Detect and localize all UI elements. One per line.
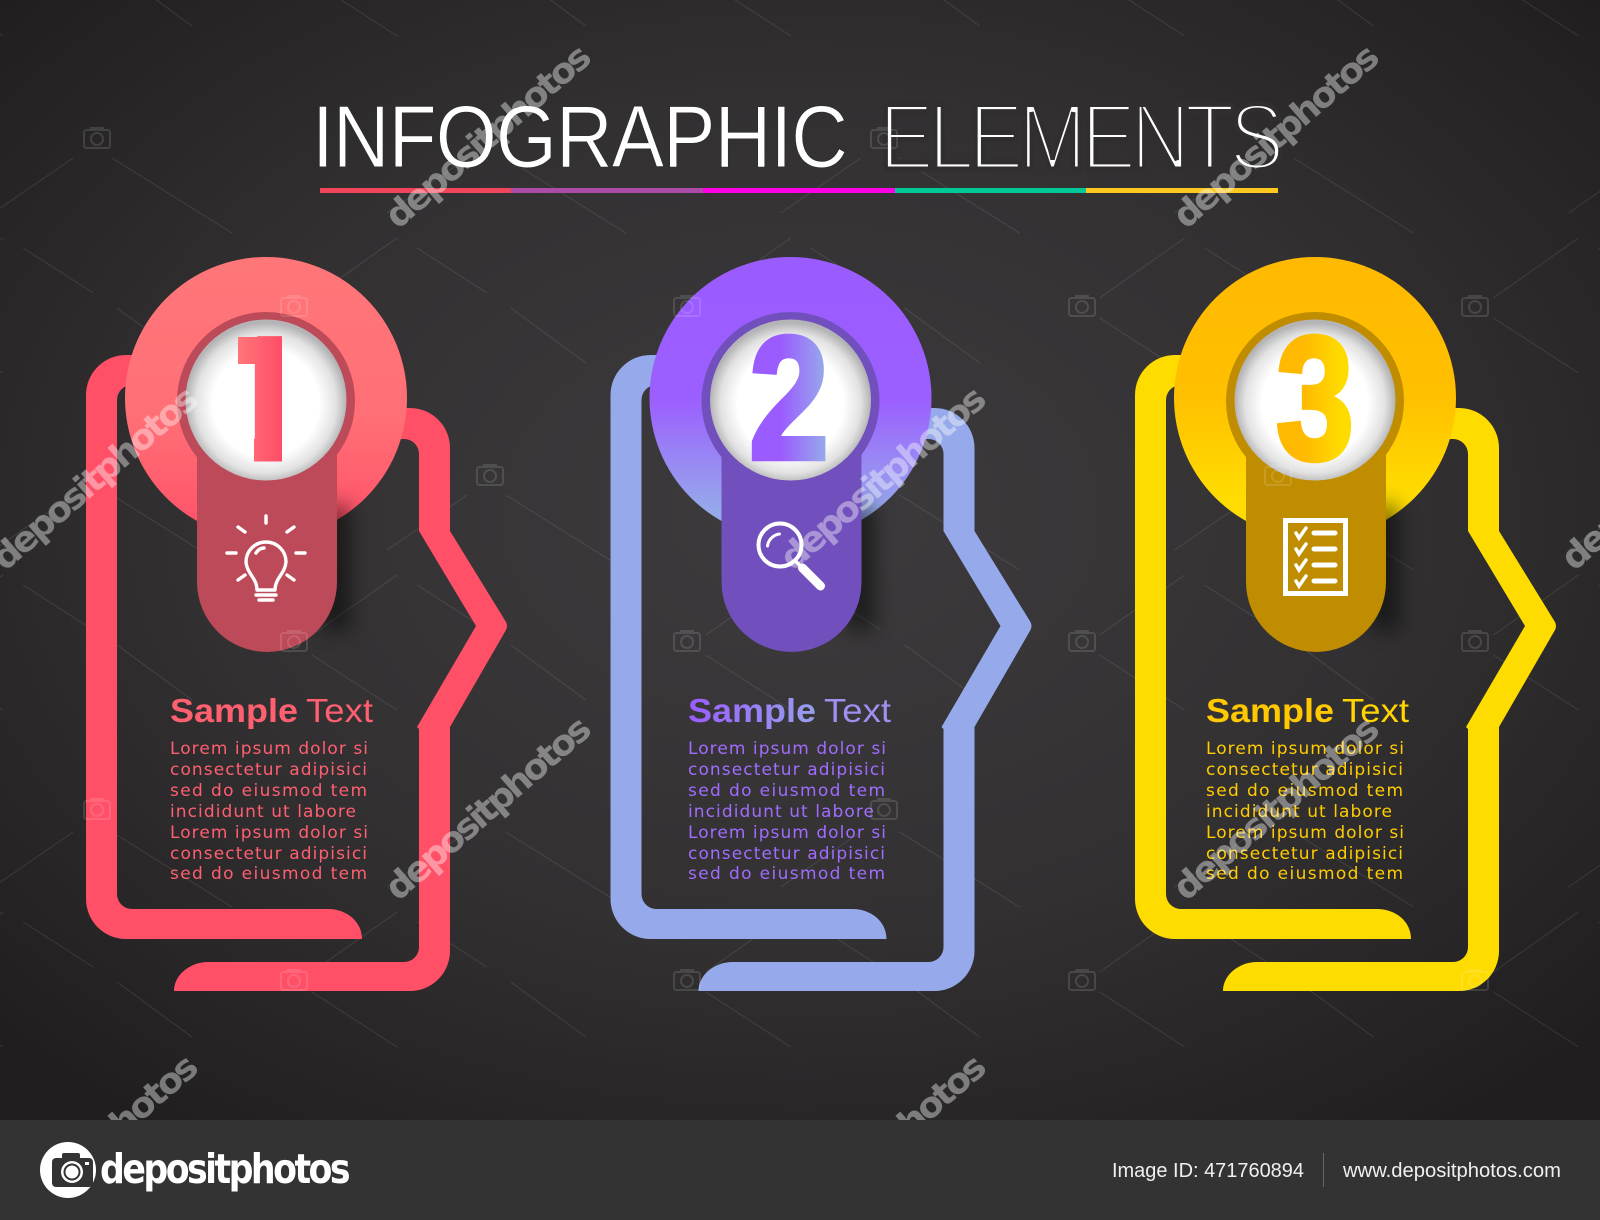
text block 1: Lorem ipsum dolor si bbox=[170, 739, 368, 759]
icon: checklist bbox=[1286, 520, 1346, 594]
panel 2: purple bbox=[610, 257, 1032, 991]
frame and badge 3 bbox=[1135, 257, 1556, 991]
footer bar bbox=[0, 1120, 1600, 1220]
text block 1: Lorem ipsum dolor si bbox=[170, 823, 368, 843]
text block 2: Lorem ipsum dolor si bbox=[688, 823, 886, 843]
text block 1: sed do eiusmod tem bbox=[170, 864, 367, 884]
watermarks: depositphotos bbox=[773, 379, 994, 579]
watermark camera icons bbox=[84, 127, 1488, 990]
text block 3: sed do eiusmod tem bbox=[1206, 781, 1403, 801]
frame and badge 1 bbox=[86, 257, 507, 991]
frame and badge 2 bbox=[610, 257, 1032, 991]
text block 1: Sample bbox=[170, 692, 298, 729]
text block 3: Sample bbox=[1206, 692, 1334, 729]
text block 3: Lorem ipsum dolor si bbox=[1206, 823, 1404, 843]
title: INFOGRAPHIC bbox=[312, 87, 847, 186]
icon: light bulb bbox=[227, 516, 305, 600]
text block 1: sed do eiusmod tem bbox=[170, 781, 367, 801]
text block 2: Sample bbox=[688, 692, 816, 729]
text block 3 bbox=[1206, 692, 1409, 884]
text block 2: consectetur adipisici bbox=[688, 844, 885, 864]
title: ELEMENTS bbox=[879, 84, 1281, 189]
icon: magnifier bbox=[758, 524, 820, 586]
website url: www.depositphotos.com bbox=[1342, 1160, 1561, 1182]
text block 2: Text bbox=[824, 692, 891, 729]
number 3: 3 bbox=[1276, 301, 1354, 496]
text block 3: sed do eiusmod tem bbox=[1206, 864, 1403, 884]
text block 1: incididunt ut labore bbox=[170, 802, 356, 822]
text block 1: Text bbox=[306, 692, 373, 729]
text block 1 bbox=[170, 692, 373, 884]
text block 2: consectetur adipisici bbox=[688, 760, 885, 780]
watermarks: depositphotos bbox=[378, 37, 599, 237]
image id: Image ID: 471760894 bbox=[1112, 1160, 1304, 1182]
logo wordmark: depositphotos bbox=[100, 1145, 349, 1193]
text block 2: Lorem ipsum dolor si bbox=[688, 739, 886, 759]
title underline: five colour bar bbox=[320, 188, 1278, 193]
number 1 bbox=[238, 336, 282, 462]
panel 1: red bbox=[86, 257, 507, 991]
text block 1: consectetur adipisici bbox=[170, 760, 367, 780]
text block 2: sed do eiusmod tem bbox=[688, 781, 885, 801]
text block 3: Text bbox=[1342, 692, 1409, 729]
text block 2: sed do eiusmod tem bbox=[688, 864, 885, 884]
text block 2: incididunt ut labore bbox=[688, 802, 874, 822]
text block 3: incididunt ut labore bbox=[1206, 802, 1392, 822]
panel 3: yellow bbox=[1135, 257, 1556, 991]
number 2: 2 bbox=[749, 300, 829, 496]
icon: logo camera bbox=[40, 1142, 96, 1198]
watermarks: depositphotos bbox=[1166, 37, 1387, 237]
text block 2 bbox=[688, 692, 891, 884]
watermarks: depositphotos bbox=[378, 709, 599, 909]
number 1: 1 bbox=[216, 302, 314, 497]
text block 1: consectetur adipisici bbox=[170, 844, 367, 864]
watermarks: depositphotos bbox=[1166, 709, 1387, 909]
title bbox=[312, 84, 1281, 189]
text block 3: consectetur adipisici bbox=[1206, 844, 1403, 864]
text block 3: Lorem ipsum dolor si bbox=[1206, 739, 1404, 759]
text block 3: consectetur adipisici bbox=[1206, 760, 1403, 780]
